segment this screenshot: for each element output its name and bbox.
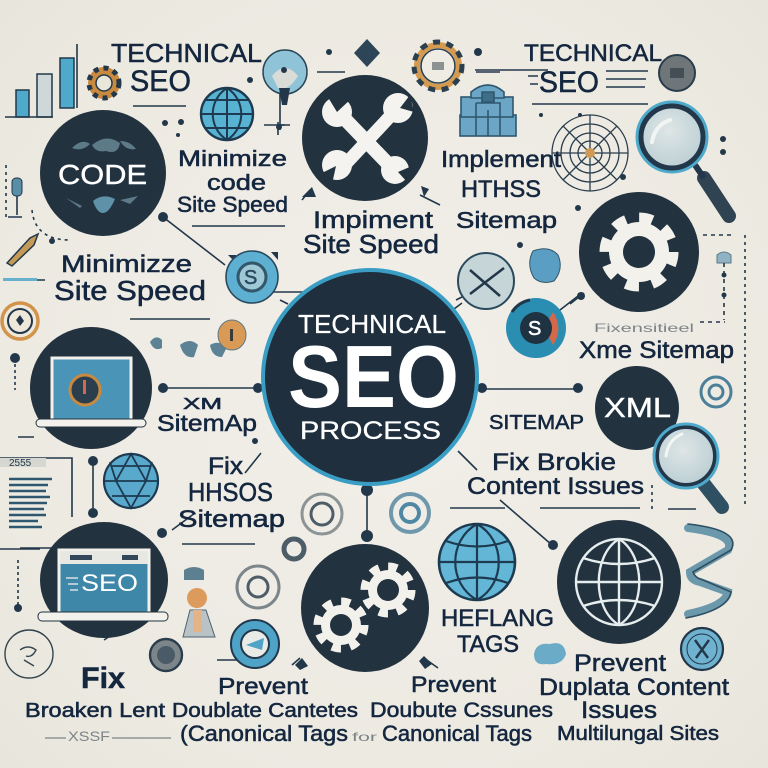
icon: left side small details	[3, 178, 55, 281]
panel: code circle: CODE	[58, 159, 147, 190]
icon: orange keyhole	[218, 320, 246, 350]
icon: right side pin	[700, 235, 735, 322]
text: minimizze site speed: Site Speed	[54, 275, 206, 306]
icon: document list: 2555	[9, 458, 32, 469]
icon: orange gear top	[414, 42, 462, 90]
text: prevent duplata content issues multilungal sites: Multilungal Sites	[557, 723, 719, 745]
text: minimizze site speed: Minimizze	[61, 251, 192, 278]
panel: laptop circle	[30, 327, 152, 449]
text: fix broaken link: Fix	[81, 662, 125, 695]
heading: technical seo left: TECHNICAL	[111, 38, 262, 68]
icon: dark circle badge	[150, 639, 182, 671]
panel: seo laptop circle	[38, 522, 168, 638]
icon: blue zigzag spring	[686, 524, 733, 618]
text: fix hhsos sitemap: Fix	[208, 453, 243, 480]
text: fix hhsos sitemap: Sitemap	[178, 506, 285, 533]
icon: crossed badge	[450, 253, 514, 312]
text: fix brokie content issues	[467, 449, 644, 500]
text: prevent doublate canonical tags	[172, 673, 377, 746]
text: prevent doubute canonical tags: Prevent	[411, 672, 496, 697]
text: minimize code site speed: Minimize	[178, 146, 287, 171]
text: heflang tags: HEFLANG	[441, 605, 554, 632]
text: heflang tags	[441, 605, 554, 658]
text: xm sitemap	[157, 396, 257, 436]
icon: grey badge top right	[659, 55, 695, 91]
text: implement hthss sitemap: Implement	[441, 146, 562, 172]
panel: gear circle	[579, 192, 699, 312]
text: sitemap right: SITEMAP	[489, 412, 584, 434]
text: fix broaken link: Broaken Lent	[25, 700, 166, 722]
panel: central technical seo process circle	[263, 270, 477, 484]
text: fix broaken link: XSSF	[68, 728, 110, 744]
icon: small grey left blobs	[150, 337, 226, 357]
icon: orange gear top left	[89, 68, 119, 98]
text: minimize code site speed	[177, 146, 288, 217]
icon: globe left	[104, 454, 158, 508]
icon: ring top right of xml	[701, 377, 731, 407]
text: impiment site speed	[303, 207, 439, 259]
icon: sketch circle	[5, 630, 53, 678]
text: prevent doublate canonical tags: Prevent	[218, 673, 309, 699]
heading: technical seo right: TECHNICAL	[524, 40, 662, 67]
icon: x badge	[681, 628, 723, 670]
icon: check badge	[231, 620, 279, 668]
text: heflang tags: TAGS	[457, 631, 519, 658]
connector lines	[0, 48, 745, 670]
text: minimize code site speed: Site Speed	[177, 192, 288, 217]
text: implement hthss sitemap	[441, 146, 562, 233]
text: prevent doublate canonical tags: (Canonical Tags	[180, 721, 348, 746]
text: xm sitemap: SitemAp	[157, 410, 257, 436]
text: fix brokie content issues: Fix Brokie	[492, 449, 616, 476]
panel: code circle	[40, 110, 166, 236]
heading: technical seo left: SEO	[130, 65, 191, 98]
heading: technical seo right	[524, 40, 662, 99]
icon: orange ring	[2, 303, 38, 339]
icon: building	[460, 85, 516, 136]
text: minimize code site speed: code	[207, 170, 266, 195]
text: fix hhsos sitemap: HHSOS	[188, 477, 273, 507]
text: xm sitemap: XM	[183, 396, 222, 413]
text: prevent duplata content issues multilungal sites: Prevent	[574, 650, 666, 677]
text: prevent duplata content issues multilungal sites: Duplata Content	[539, 674, 729, 701]
text: prevent doubute canonical tags: Doubute Cssunes	[370, 699, 553, 722]
icon: magnifying glass xml	[654, 424, 722, 507]
text: prevent doublate canonical tags: Doublate Cantetes	[172, 700, 358, 722]
icon: s gauge: S	[528, 318, 541, 340]
icon: document list	[0, 458, 72, 527]
panel: globe circle	[557, 520, 681, 644]
icon: s badge left	[226, 251, 278, 303]
text: prevent duplata content issues multilungal sites	[539, 650, 729, 745]
panel: central technical seo process circle: PROCESS	[300, 417, 441, 445]
icon: speech bubble	[530, 249, 560, 282]
text: prevent duplata content issues multilungal sites: Issues	[581, 697, 657, 724]
icon: bar chart	[5, 44, 77, 117]
icon: small person and blobs	[183, 567, 215, 637]
panel: gears circle	[301, 544, 429, 672]
panel: central technical seo process circle: SEO	[288, 327, 459, 426]
icon: pin balloon	[263, 50, 307, 135]
text: impiment site speed: Site Speed	[303, 229, 439, 259]
panel: xml circle: XML	[604, 392, 671, 423]
text: fix broaken link	[25, 662, 171, 744]
icon: blue blob	[534, 643, 566, 664]
panel: wrench circle	[302, 75, 428, 201]
heading: technical seo left	[111, 38, 262, 98]
text: fix hhsos sitemap	[178, 453, 285, 533]
icon: magnifying glass large	[637, 102, 729, 216]
panel: xml circle	[595, 366, 679, 450]
text: prevent doubute canonical tags: Canonical Tags	[382, 721, 532, 746]
icon: radar web	[552, 115, 628, 191]
icon: concentric grey badges	[237, 494, 429, 608]
text: implement hthss sitemap: Sitemap	[456, 207, 557, 233]
text: implement hthss sitemap: HTHSS	[461, 176, 541, 203]
icon: globe small top	[201, 88, 253, 140]
text: fixenstileel xme sitemap	[579, 321, 734, 364]
icon: diamond	[354, 39, 380, 67]
heading: technical seo right: SEO	[539, 66, 599, 99]
panel: seo laptop circle: SEO	[81, 570, 138, 597]
text: prevent doublate canonical tags: for	[352, 730, 377, 744]
icon: s badge left: S	[244, 267, 257, 289]
text: fixenstileel xme sitemap: Fixensitieel	[594, 321, 694, 335]
text: prevent doubute canonical tags	[370, 672, 553, 746]
icon: globe large blue	[439, 524, 515, 600]
text: fix brokie content issues: Content Issues	[467, 473, 644, 500]
icon: s gauge	[506, 292, 585, 358]
text: fixenstileel xme sitemap: Xme Sitemap	[579, 337, 734, 364]
text: impiment site speed: Impiment	[313, 207, 433, 234]
panel: central technical seo process circle: TECHNICAL	[298, 309, 446, 339]
text: minimizze site speed	[54, 251, 206, 306]
